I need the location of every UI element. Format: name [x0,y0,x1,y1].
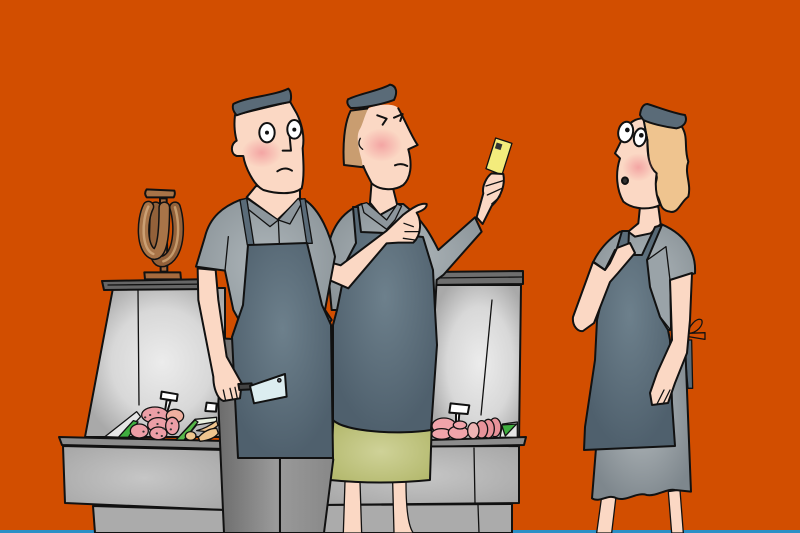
face outline [363,108,418,189]
character: butcher man [196,89,335,533]
meat speckles [143,413,172,436]
shirt [196,193,335,337]
hair [344,108,377,167]
nose [283,137,291,151]
cheek blush [242,138,282,168]
tray of meat: right [432,403,517,439]
neck [370,182,397,215]
mouth [277,168,292,171]
arm and hand with cleaver [198,268,287,403]
shirt front placket [277,220,280,243]
sausages on stand [144,189,181,279]
eyebrows and eyes [377,114,403,125]
pointing arm [322,204,427,288]
mouth [395,164,407,166]
cap [233,89,291,115]
raised hand [477,173,504,224]
ID card [486,138,512,175]
neck [628,207,661,237]
price tag [161,392,178,412]
left arm and hand on chest [573,243,635,331]
skirt [592,340,691,500]
eyes [259,123,275,142]
apron straps [240,198,312,245]
eyes [616,120,635,144]
counter: left display case [59,279,225,533]
shirt [593,224,695,330]
character: woman in centre [322,85,512,533]
tray of meat: left [105,392,218,441]
head [232,102,304,193]
legs [343,482,362,533]
legs [597,490,683,533]
counter: right display case [323,271,526,533]
cleaver blade [250,374,287,403]
poultry [185,421,218,441]
ear line [359,138,363,149]
price tag [449,403,469,422]
crossbar [145,189,175,197]
stand base [144,198,181,279]
hair [643,120,689,212]
price tag 2 [205,403,217,412]
character: woman on right [573,104,705,533]
cleaver handle [238,383,252,390]
face [615,118,660,208]
cap [347,85,396,108]
shirt [327,204,482,310]
cap [640,104,686,128]
floor strip [0,530,800,533]
meat pieces [130,407,184,440]
trousers [218,338,333,533]
collar [247,198,302,227]
apron [333,207,437,432]
apron tie [684,340,693,388]
sausage rings [144,207,178,261]
apron [584,225,675,450]
mouth [622,177,628,184]
neck [247,186,300,220]
olive skirt [330,421,432,482]
collar [362,203,402,229]
face fill [358,105,418,189]
side panel [647,247,671,330]
right arm [650,273,692,405]
apron [232,243,333,458]
